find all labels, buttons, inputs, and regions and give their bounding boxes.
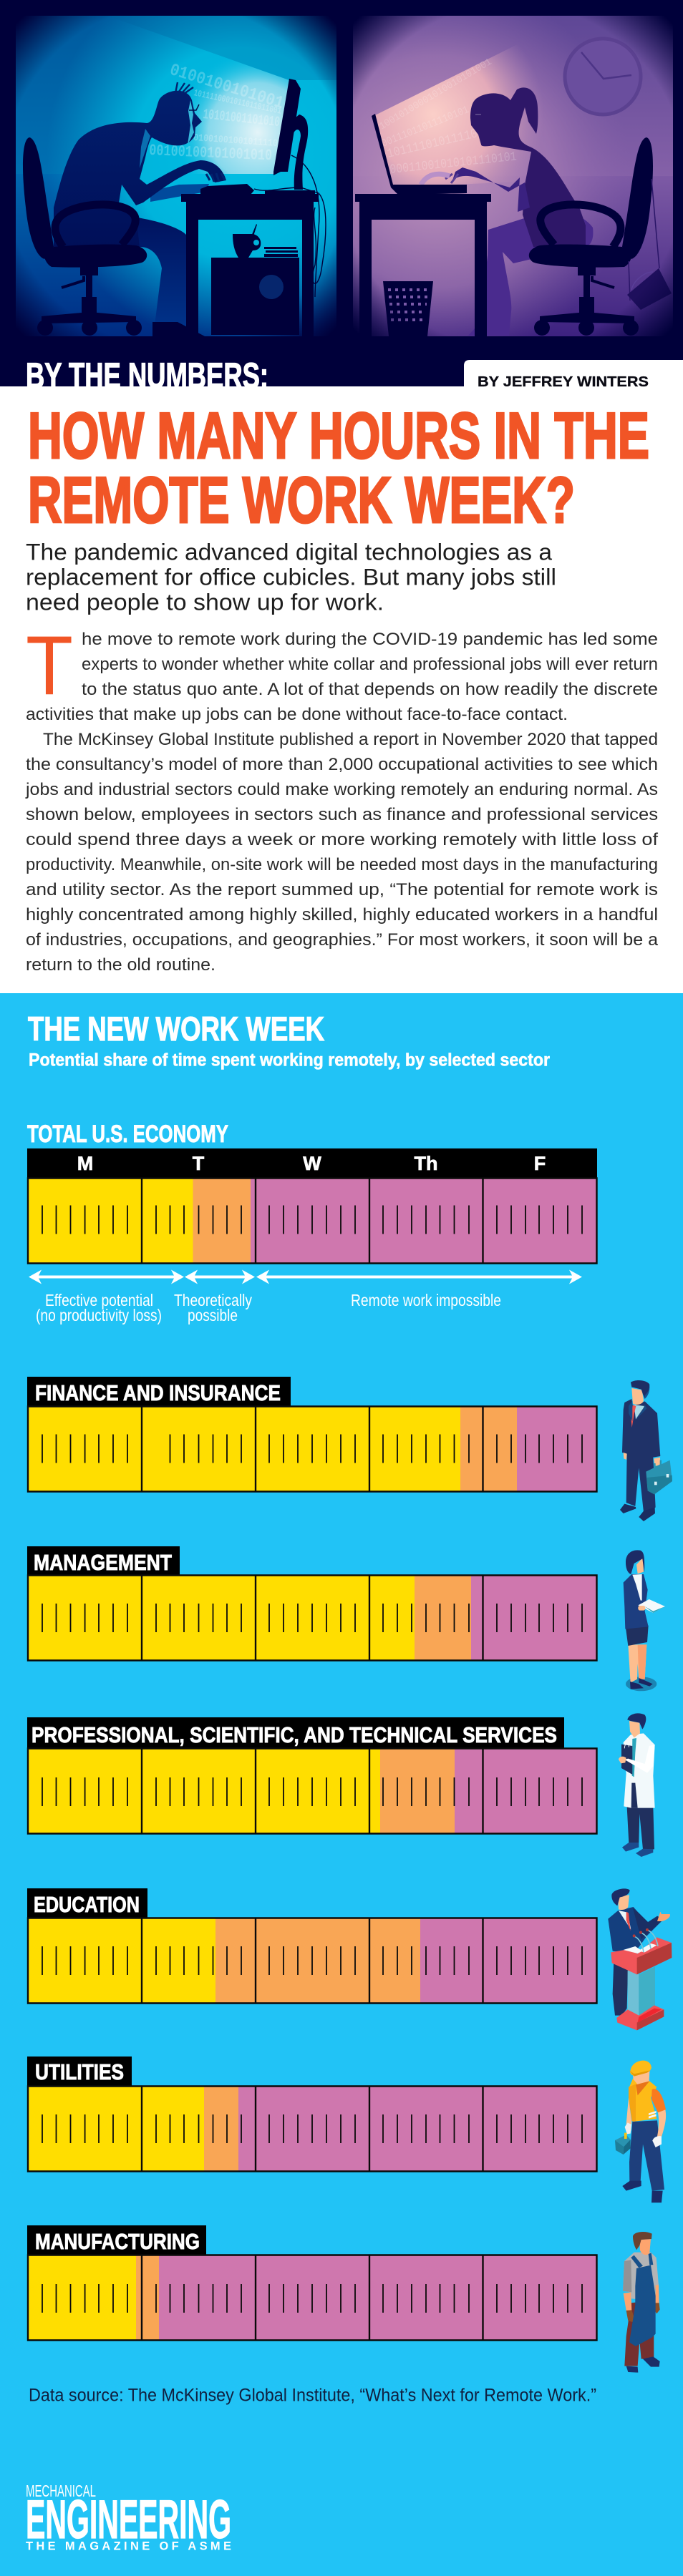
logo: Mechanical Engineering: ENGINEERING — [26, 2489, 231, 2550]
total U.S. economy chart: W — [303, 1153, 321, 1174]
chart heading — [28, 1010, 550, 1070]
kicker: by the numbers: BY THE NUMBERS: — [26, 356, 268, 396]
article body: The McKinsey Global Institute published a report in November 2020 that tapped — [43, 730, 658, 749]
article body: and utility sector. As the report summed up, “The potential for remote work is — [26, 880, 658, 899]
article body: of industries, occupations, and geographies.” For most workers, it soon will be a — [26, 930, 659, 950]
icon: hard-hat utility worker — [615, 2061, 666, 2202]
article body: return to the old routine. — [26, 955, 215, 975]
article body: the consultancy’s model of more than 2,000 occupational activities to see which — [26, 755, 658, 774]
icon: businesswoman with tablet — [624, 1550, 665, 1691]
waste basket — [383, 281, 433, 336]
panel: man at desktop computer: 1011110001011011011001 — [193, 87, 283, 117]
chart: professional, scientific, and technical services: PROFESSIONAL, SCIENTIFIC, AND TECHNICAL SERVICES — [32, 1722, 557, 1747]
legend arrows — [29, 1269, 582, 1284]
desk — [181, 194, 319, 336]
logo: Mechanical Engineering: THE MAGAZINE OF ASME — [26, 2540, 231, 2553]
article body: highly concentrated among highly skilled, highly educated workers in a handful — [26, 905, 658, 924]
panel: woman at laptop: 1011110101111010111 — [386, 119, 511, 162]
article body: activities that make up jobs can be done without face-to-face contact. — [26, 705, 568, 724]
chart: professional, scientific, and technical services — [27, 1717, 597, 1833]
total U.S. economy chart: F — [534, 1153, 546, 1174]
legend labels: possible — [188, 1306, 238, 1324]
handbag — [627, 179, 672, 310]
panel: man at desktop computer: 0100100101001 — [168, 61, 286, 114]
chart: education: EDUCATION — [34, 1892, 140, 1917]
panel: man at desktop computer — [16, 16, 336, 336]
article body — [25, 618, 659, 975]
logo: Mechanical Engineering: MECHANICAL — [26, 2482, 96, 2500]
chart: utilities: UTILITIES — [35, 2059, 124, 2084]
panel: man at desktop computer: 01001001001011110 — [193, 132, 278, 150]
icon: businessman with briefcase — [620, 1380, 672, 1521]
laptop — [372, 114, 467, 195]
subheading: The pandemic advanced digital technologies as a — [26, 540, 552, 565]
byline tab — [464, 360, 683, 390]
chart: finance and insurance: FINANCE AND INSURANCE — [35, 1380, 281, 1405]
article body: to the status quo ante. A lot of that depends on how readily the discrete — [82, 680, 658, 699]
panel: man at desktop computer: 10101001101010 — [202, 107, 281, 131]
logo: Mechanical Engineering — [26, 2482, 231, 2553]
article body: could spend three days a week or more working remotely with little loss of — [26, 830, 658, 849]
panel: woman at laptop — [353, 16, 673, 336]
panel: woman at laptop: 10010100001010010101001 — [377, 57, 494, 132]
chart: management: MANAGEMENT — [34, 1550, 172, 1575]
legend labels: (no productivity loss) — [36, 1306, 162, 1324]
total U.S. economy chart — [27, 1121, 597, 1264]
article body: jobs and industrial sectors could make working remotely an enduring normal. As — [25, 780, 658, 799]
legend labels: Theoretically — [174, 1291, 252, 1309]
title — [28, 400, 649, 537]
subheading: replacement for office cubicles. But many jobs still — [26, 564, 556, 590]
article body: productivity. Meanwhile, on-site work will be needed most days in the manufacturing — [26, 855, 658, 874]
subheading: need people to show up for work. — [26, 590, 384, 615]
chart: education — [27, 1888, 597, 2004]
chart heading: Potential share of time spent working remotely, by selected sector — [29, 1050, 550, 1070]
legend labels: Effective potential — [45, 1291, 153, 1309]
panel: man at desktop computer: 00100100101001010 — [149, 142, 273, 165]
icon: doctor with clipboard — [619, 1713, 655, 1857]
subheading — [26, 540, 556, 615]
legend labels: Remote work impossible — [351, 1291, 501, 1309]
panel: woman at laptop: 00011001010101110101 — [389, 150, 518, 177]
chart: finance and insurance — [27, 1377, 597, 1491]
data source note: Data source: The McKinsey Global Institute, “What’s Next for Remote Work.” — [29, 2386, 596, 2406]
chart: management — [27, 1546, 597, 1660]
chart: manufacturing: MANUFACTURING — [35, 2229, 200, 2254]
total U.S. economy chart: Th — [414, 1153, 438, 1174]
total U.S. economy chart: M — [77, 1153, 93, 1174]
panel: blue chart background — [0, 993, 683, 2576]
icon: speaker at podium — [608, 1888, 672, 2030]
chart: manufacturing — [27, 2225, 597, 2340]
icon: worker in apron — [623, 2232, 660, 2373]
panel: woman at laptop: 00111011011110101 — [380, 104, 470, 150]
chart heading: THE NEW WORK WEEK — [28, 1010, 324, 1048]
monitor and keyboard — [200, 79, 315, 195]
drop cap: T — [26, 618, 73, 712]
header illustration — [0, 0, 683, 386]
article body: shown below, employees in sectors such as finance and professional services — [26, 805, 658, 824]
wall clock — [565, 39, 641, 114]
chart: utilities — [27, 2057, 597, 2171]
legend labels — [36, 1291, 501, 1324]
article body: experts to wonder whether white collar and professional jobs will ever return — [82, 655, 658, 674]
total U.S. economy chart: T — [193, 1153, 205, 1174]
article body: he move to remote work during the COVID-19 pandemic has led some — [82, 630, 658, 649]
desk — [355, 194, 491, 336]
total U.S. economy chart: TOTAL U.S. ECONOMY — [27, 1121, 228, 1148]
byline tab: BY JEFFREY WINTERS — [478, 374, 649, 390]
